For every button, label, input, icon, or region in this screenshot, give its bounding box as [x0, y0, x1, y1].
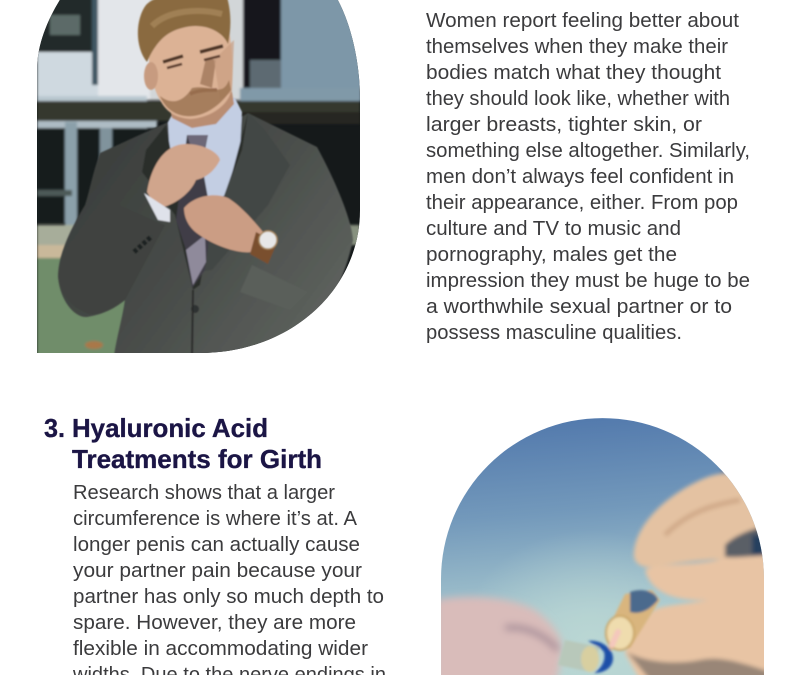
- text block: girth paragraph: partner has only so much depth to: [73, 586, 384, 608]
- text block: body image paragraph: their appearance, either. From pop: [426, 192, 738, 214]
- heading: 3. Hyaluronic Acid Treatments for Girth: [44, 413, 322, 474]
- watch: [250, 232, 277, 264]
- lapels: [142, 113, 248, 290]
- text block: body image paragraph: a worthwhile sexual partner or to: [426, 296, 732, 318]
- hair: [138, 0, 230, 62]
- text block: girth paragraph: spare. However, they are more: [73, 612, 356, 634]
- text block: body image paragraph: they should look like, whether with: [426, 88, 730, 110]
- text block: girth paragraph: longer penis can actually cause: [73, 534, 360, 556]
- tie: [176, 135, 208, 287]
- jacket: [58, 113, 353, 356]
- face: [148, 26, 232, 120]
- text block: body image paragraph: impression they must be huge to be: [426, 270, 750, 292]
- lower right hand: [625, 555, 770, 675]
- text block: body image paragraph: men don’t always feel confident in: [426, 166, 734, 188]
- text block: girth paragraph: circumference is where it’s at. A: [73, 508, 358, 530]
- sleeve buttons: [134, 236, 152, 252]
- text block: body image paragraph: [426, 10, 750, 344]
- text block: body image paragraph: pornography, males get the: [426, 244, 677, 266]
- shirt: [168, 98, 242, 205]
- heading: 3. Hyaluronic Acid Treatments for Girth: Hyaluronic Acid: [72, 413, 268, 443]
- photo: hands holding a syringe and vial: [436, 418, 770, 675]
- text block: body image paragraph: Women report feeling better about: [426, 10, 739, 32]
- text block: girth paragraph: your partner pain because your: [73, 560, 362, 582]
- text block: girth paragraph: flexible in accommodating wider: [73, 638, 368, 660]
- syringe with blue cap: [558, 640, 600, 672]
- vial held in fingers: [605, 590, 660, 650]
- left hand: [436, 597, 563, 675]
- neck: [166, 92, 234, 128]
- ear: [144, 62, 158, 90]
- text block: body image paragraph: themselves when they make their: [426, 36, 728, 58]
- text block: body image paragraph: something else altogether. Similarly,: [426, 140, 750, 162]
- left hand: [147, 144, 220, 208]
- text block: girth paragraph: Research shows that a larger: [73, 482, 335, 504]
- right hand: [184, 195, 263, 252]
- heading: 3. Hyaluronic Acid Treatments for Girth: 3.: [44, 413, 65, 443]
- upper right fingers: [634, 474, 768, 567]
- text block: girth paragraph: [72, 482, 386, 675]
- photo: man adjusting his tie: [37, 0, 361, 358]
- text block: body image paragraph: larger breasts, tighter skin, or: [426, 114, 702, 136]
- text block: body image paragraph: bodies match what they thought: [426, 62, 721, 84]
- heading: 3. Hyaluronic Acid Treatments for Girth: Treatments for Girth: [72, 444, 322, 474]
- text block: body image paragraph: possess masculine qualities.: [426, 322, 682, 344]
- text block: body image paragraph: culture and TV to music and: [426, 218, 681, 240]
